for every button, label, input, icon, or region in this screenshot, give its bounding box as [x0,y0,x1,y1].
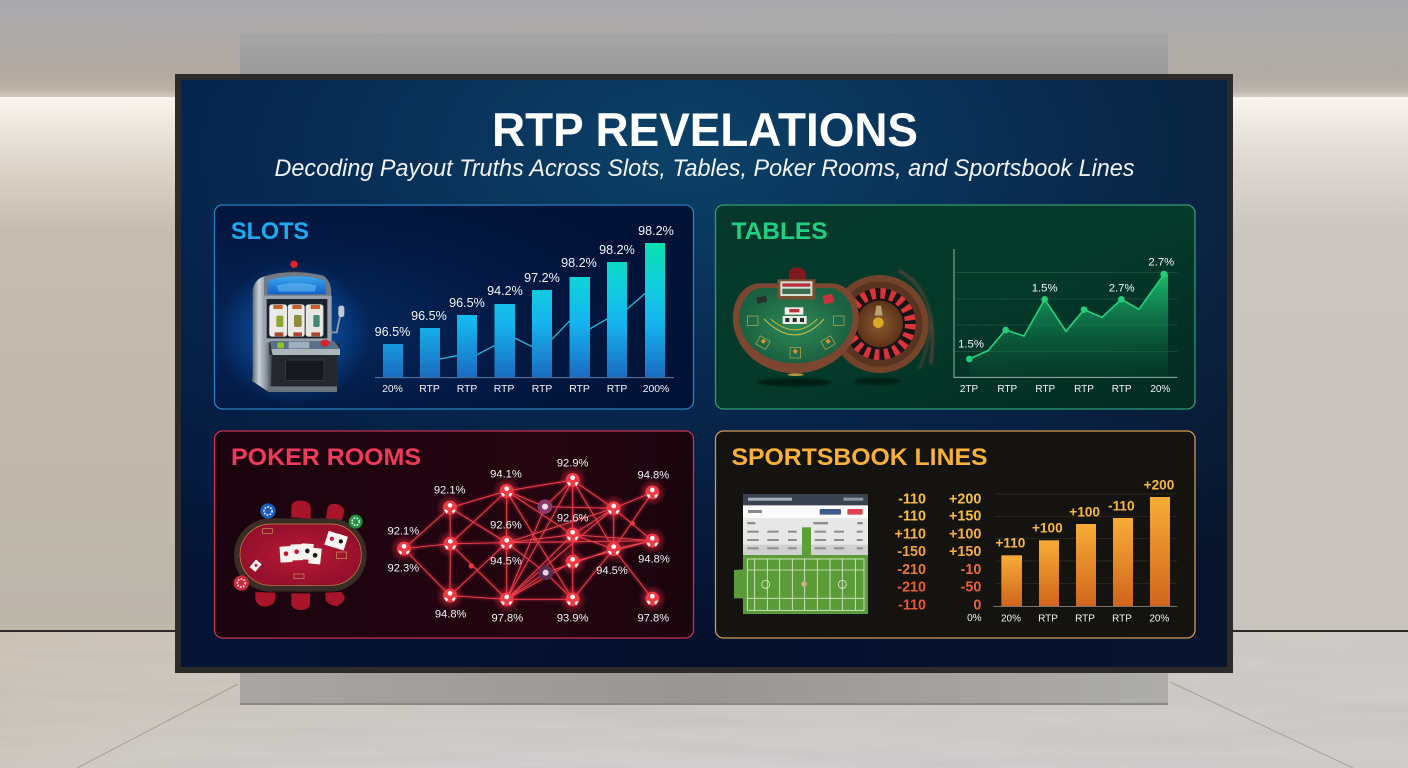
axis labels: RTP [457,384,477,395]
axis labels: RTP [569,384,590,395]
axis labels: 2TP [960,384,978,395]
axis labels: RTP [1038,613,1058,624]
value labels: +110 [995,536,1026,551]
value labels: 94.8% [638,554,670,566]
axis labels [1001,613,1169,624]
icon: slot machine [217,261,371,406]
value labels: +100 [1032,521,1063,536]
axis labels: RTP [1075,613,1095,624]
axis labels: RTP [1112,384,1132,395]
panel: sportsbook lines [716,431,1195,638]
value labels: 92.6% [490,519,522,531]
axis labels: RTP [1112,613,1132,624]
value labels: 94.8% [435,608,467,620]
odds columns: -110 [898,509,926,525]
axis labels: RTP [1035,384,1056,395]
value labels: 92.1% [388,526,419,538]
value labels: 92.3% [388,563,419,575]
value labels: 94.2% [487,284,523,298]
odds columns: -210 [897,580,926,596]
axis labels: 20% [1001,613,1021,624]
axis labels: RTP [532,384,552,395]
axis labels: 20% [1150,384,1170,395]
axis labels: RTP [419,384,440,395]
axis labels [960,384,1170,395]
value labels: 98.2% [638,224,674,238]
axis labels: 20% [1149,613,1169,624]
value labels: 96.5% [449,296,485,310]
value labels: 2.7% [1109,282,1135,294]
value labels: 94.5% [596,565,628,577]
value labels: 2.7% [1148,256,1174,268]
odds columns [895,491,982,624]
bars [1001,497,1170,606]
value labels: 97.2% [524,271,560,285]
area chart: tables RTP [954,249,1177,395]
value labels [958,256,1174,350]
value labels: 94.1% [490,469,522,481]
trend line [440,293,645,359]
nodes [390,466,666,613]
odds columns: -50 [961,580,981,596]
value labels: 98.2% [561,256,597,270]
title: RTP REVELATIONS [492,103,918,156]
value labels: 92.1% [434,484,466,496]
heading: tables: TABLES [732,218,828,245]
axis labels: RTP [494,384,514,395]
icon: roulette wheel [831,271,933,385]
value labels [375,224,674,339]
display screen frame [175,74,1233,673]
chips [234,503,363,591]
panel: slots [214,205,694,409]
odds columns: +100 [949,526,981,542]
odds columns: 0 [973,597,981,613]
value labels: -110 [1108,498,1135,513]
odds columns: +150 [949,544,981,560]
cards [250,531,348,572]
panel: tables [716,205,1195,409]
chairs [255,501,345,610]
value labels [388,458,670,624]
connections [404,480,652,599]
odds columns: -10 [961,562,981,578]
odds columns: -210 [897,562,926,578]
value labels: 94.8% [638,469,669,481]
axis labels: RTP [1074,384,1094,395]
heading: slots: SLOTS [231,218,309,245]
heading: poker rooms: POKER ROOMS [231,444,421,471]
value labels: 96.5% [375,325,410,339]
subtitle: Decoding Payout Truths Across Slots, Tables, Poker Rooms, and Sportsbook Lines [274,155,1134,182]
bar chart: sportsbook lines [993,477,1177,624]
odds columns: +110 [895,526,926,542]
value labels: 1.5% [958,338,984,350]
value labels: 96.5% [411,309,447,323]
bar chart: slots RTP [375,224,674,395]
icon: blackjack table [733,267,859,386]
value labels: +100 [1069,505,1100,520]
value labels: 98.2% [599,243,635,257]
odds columns: +150 [949,509,981,525]
value labels [995,477,1175,551]
value labels: 93.9% [557,612,589,624]
value labels: +200 [1144,477,1175,492]
axis labels [382,384,669,395]
bars [383,243,665,377]
axis labels: 200% [643,384,669,395]
network diagram: poker RTP [388,458,670,624]
odds columns: -110 [898,491,926,507]
icon: poker table [234,501,367,610]
axis labels: RTP [997,384,1018,395]
value labels: 92.6% [557,513,589,525]
odds columns: 0% [967,613,982,624]
value labels: 97.8% [492,612,523,624]
value labels: 94.5% [490,555,522,567]
value labels: 1.5% [1032,282,1058,294]
value labels: 97.8% [638,612,669,624]
axis labels: 20% [382,384,403,395]
odds columns: +200 [949,491,981,507]
odds columns: -110 [898,597,926,613]
odds columns: -150 [897,544,926,560]
axis labels: RTP [607,384,627,395]
heading: sportsbook lines: SPORTSBOOK LINES [732,444,988,471]
panel: poker rooms [214,431,694,638]
value labels: 92.9% [557,458,589,470]
icon: sportsbook screen and field [734,494,868,614]
